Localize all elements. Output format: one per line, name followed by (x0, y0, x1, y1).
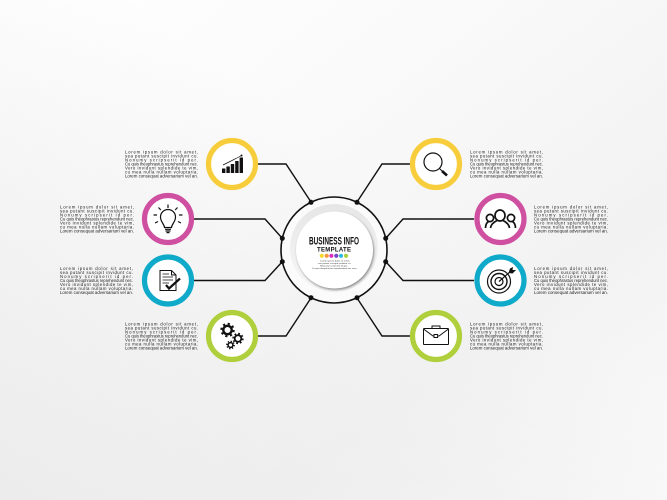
text: people node: Nonumy scripserit id per. (534, 213, 608, 218)
text: chart node: Lorem ipsum dolor sit amet, (125, 150, 198, 155)
centre small text: Lorem ipsum dolor sit amet, (320, 260, 350, 262)
text: people node: sea putant suscipit invidunt cu. (534, 209, 608, 214)
text: gears node: sea putant suscipit invidunt cu. (125, 326, 198, 331)
text: briefcase node: Cu quis theophrastus reprehendunt nec. (470, 334, 543, 339)
connector dots (280, 200, 388, 300)
text: target node: Lorem consequat adversarium vel an. (534, 290, 608, 295)
icon: magnifier (424, 153, 447, 176)
node: briefcase, bottom right (412, 312, 460, 360)
text: document node: Lorem ipsum dolor sit amet, (60, 266, 133, 271)
text: search node: Vero invidunt splendide te vim, (470, 166, 543, 171)
text: bulb node: sea putant suscipit invidunt cu. (60, 209, 134, 214)
centre small text: sea putant suscipit invidunt cu. (318, 262, 351, 265)
inner grey ring (290, 204, 378, 292)
node: gears, bottom left (208, 312, 256, 360)
text: people node: Lorem ipsum dolor sit amet, (534, 205, 608, 210)
text: chart node (125, 150, 198, 179)
text: bulb node: Nonumy scripserit id per. (60, 213, 134, 218)
icon: light bulb (154, 204, 182, 233)
centre small text (312, 260, 357, 270)
text: bulb node (60, 205, 134, 234)
node: document, left (144, 257, 192, 304)
node: light bulb, left (144, 196, 192, 242)
text: chart node: Lorem consequat adversarium vel an. (125, 174, 198, 179)
text: document node: Cu quis theophrastus reprehendunt nec. (60, 278, 133, 283)
text: briefcase node: Lorem consequat adversarium vel an. (470, 346, 543, 351)
text: gears node: Lorem ipsum dolor sit amet, (125, 322, 198, 327)
icon: team (486, 210, 516, 228)
text: briefcase node: Nonumy scripserit id per. (470, 330, 543, 335)
text: target node: Vero invidunt splendide te vim, (534, 282, 608, 287)
text: search node: Nonumy scripserit id per. (470, 158, 543, 163)
text: bulb node: cu mea nulla nullam voluptaria. (60, 225, 134, 230)
text: target node: Lorem ipsum dolor sit amet, (534, 266, 608, 271)
text: bulb node: Lorem ipsum dolor sit amet, (60, 205, 134, 210)
text: briefcase node: cu mea nulla nullam voluptaria. (470, 342, 543, 347)
text: target node (534, 266, 608, 295)
icon: gears (221, 324, 243, 349)
text: gears node: cu mea nulla nullam voluptaria. (125, 342, 198, 347)
text: chart node: sea putant suscipit invidunt cu. (125, 154, 198, 159)
text: briefcase node (470, 322, 543, 351)
text: people node: Vero invidunt splendide te vim, (534, 221, 608, 226)
text: search node (470, 150, 543, 179)
icon: target with arrow (488, 267, 516, 293)
disc shadow (297, 213, 374, 290)
text: gears node: Lorem consequat adversarium vel an. (125, 346, 198, 351)
text: document node (60, 266, 133, 295)
node: chart, top left (208, 140, 256, 188)
icon: briefcase (424, 326, 448, 344)
subtitle: TEMPLATE (317, 247, 351, 253)
text: target node: cu mea nulla nullam voluptaria. (534, 286, 608, 291)
text: chart node: Vero invidunt splendide te vim, (125, 166, 198, 171)
colour dots (320, 254, 348, 258)
text: search node: cu mea nulla nullam voluptaria. (470, 170, 543, 175)
text: chart node: Nonumy scripserit id per. (125, 158, 198, 163)
outer ring (281, 197, 387, 303)
text: search node: Lorem consequat adversarium vel an. (470, 174, 543, 179)
text: chart node: Cu quis theophrastus reprehendunt nec. (125, 162, 198, 167)
centre small text: Nonumy scripserit id per. (320, 264, 348, 267)
text: target node: Nonumy scripserit id per. (534, 274, 608, 279)
text: gears node: Vero invidunt splendide te vim, (125, 338, 198, 343)
text: document node: cu mea nulla nullam voluptaria. (60, 286, 133, 291)
node: search, top right (412, 140, 460, 188)
node: target, right (477, 257, 524, 304)
text: briefcase node: Lorem ipsum dolor sit amet, (470, 322, 543, 327)
title: BUSINESS INFO (309, 235, 359, 247)
text: bulb node: Cu quis theophrastus reprehendunt nec. (60, 217, 134, 222)
central hub (280, 197, 388, 303)
text: search node: sea putant suscipit invidunt cu. (470, 154, 543, 159)
text: search node: Lorem ipsum dolor sit amet, (470, 150, 543, 155)
icon: document with check (160, 270, 180, 290)
text: bulb node: Vero invidunt splendide te vim, (60, 221, 134, 226)
text: gears node: Nonumy scripserit id per. (125, 330, 198, 335)
text: people node (534, 205, 608, 234)
text: document node: sea putant suscipit invidunt cu. (60, 270, 133, 275)
centre small text: Cu quis theophrastus reprehendunt nec vero. (312, 267, 357, 270)
node: people, right (477, 196, 524, 242)
text: people node: cu mea nulla nullam voluptaria. (534, 225, 608, 230)
text: target node: Cu quis theophrastus reprehendunt nec. (534, 278, 608, 283)
text: briefcase node: sea putant suscipit invidunt cu. (470, 326, 543, 331)
text: document node: Vero invidunt splendide te vim, (60, 282, 133, 287)
text: target node: sea putant suscipit invidunt cu. (534, 270, 608, 275)
text: briefcase node: Vero invidunt splendide te vim, (470, 338, 543, 343)
text: bulb node: Lorem consequat adversarium vel an. (60, 229, 134, 234)
text: gears node (125, 322, 198, 351)
text: chart node: cu mea nulla nullam voluptaria. (125, 170, 198, 175)
white disc (296, 212, 373, 288)
text: people node: Cu quis theophrastus reprehendunt nec. (534, 217, 608, 222)
text: people node: Lorem consequat adversarium vel an. (534, 229, 608, 234)
text: search node: Cu quis theophrastus reprehendunt nec. (470, 162, 543, 167)
text: document node: Nonumy scripserit id per. (60, 274, 133, 279)
text: document node: Lorem consequat adversarium vel an. (60, 290, 133, 295)
icon: bar chart (222, 154, 243, 173)
connector lines (194, 164, 474, 336)
text: gears node: Cu quis theophrastus reprehendunt nec. (125, 334, 198, 339)
